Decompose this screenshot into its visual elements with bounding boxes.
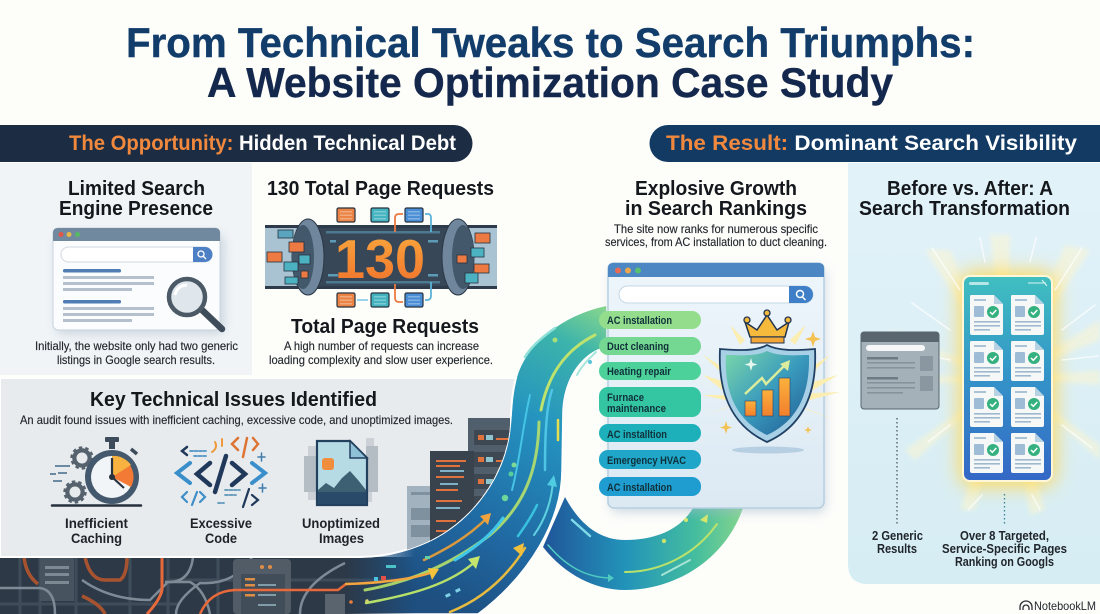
glow burst behind results (890, 235, 1100, 515)
heading: explosive growth: in Search Rankings (625, 197, 807, 220)
label: inefficient caching: Caching (71, 530, 122, 546)
label: over 8 targeted: Ranking on Googls (955, 555, 1054, 569)
text: initially: Initially, the website only had two generic (35, 339, 238, 353)
ribbon: lower u-shaped flow (543, 497, 743, 590)
label: over 8 targeted: Service-Specific Pages (942, 542, 1067, 556)
text: requests description: loading complexity and slow user experience. (269, 353, 493, 367)
ribbon: main s-curve flow (340, 305, 607, 614)
label: inefficient caching (65, 515, 128, 546)
before: gray browser (861, 332, 939, 409)
title: A Website Optimization Case Study (207, 59, 894, 106)
ranking chips: AC installation (607, 315, 672, 327)
panel: limited search engine presence (35, 177, 238, 367)
heading: 130 total page requests: 130 Total Page Requests (267, 177, 494, 200)
header: the opportunity (0, 125, 472, 162)
text: audit description: An audit found issues with inefficient caching, excessive code, and unoptimized images. (20, 413, 453, 427)
heading: limited search (59, 177, 213, 220)
panel: limited search background (0, 163, 252, 375)
after: phone with eight result pages (963, 276, 1052, 481)
illustration: server stacks (407, 418, 510, 556)
heading: before vs after (859, 177, 1070, 220)
heading: limited search: Engine Presence (59, 197, 213, 220)
label: over 8 targeted (942, 529, 1067, 569)
icon: pixelated image file (304, 438, 378, 505)
icon: shield with crown (702, 310, 840, 454)
heading: before vs after: Before vs. After: A (887, 177, 1053, 200)
panel: explosive growth (599, 177, 840, 513)
title (126, 19, 975, 106)
ranking chips: AC installtion (607, 429, 667, 441)
background: dark circuit strip (0, 557, 440, 614)
text: requests description (269, 339, 493, 367)
text: rankings description (605, 222, 827, 249)
heading: total page requests: Total Page Requests (291, 315, 479, 338)
ranking chips: Duct cleaning (607, 341, 669, 353)
header: the result (650, 125, 1100, 162)
text: initially: listings in Google search results. (57, 353, 215, 367)
title: From Technical Tweaks to Search Triumphs: (126, 19, 975, 66)
panel: before vs after (848, 163, 1100, 584)
text: initially (35, 339, 238, 367)
ranking chips: maintenance (607, 403, 666, 415)
ranking chips: Heating repair (607, 366, 672, 378)
ranking chips (599, 311, 701, 496)
ranking chips: Furnace (607, 392, 644, 404)
icon: browser with magnifier (53, 228, 224, 334)
number 130: 130 (335, 228, 425, 290)
label: over 8 targeted: Over 8 Targeted, (960, 529, 1049, 543)
label: unoptimized images: Images (319, 530, 364, 546)
label: excessive code: Code (205, 530, 237, 546)
text: requests description: A high number of requests can increase (284, 339, 479, 353)
illustration: 130 pipe (265, 208, 497, 307)
connector: dotted lines (897, 418, 1004, 524)
label: 2 generic results (872, 529, 923, 556)
heading: explosive growth (625, 177, 807, 220)
label: unoptimized images (302, 515, 380, 546)
label: 2 generic results: Results (877, 542, 917, 556)
heading: key technical issues: Key Technical Issues Identified (90, 388, 377, 411)
panel: 130 total page requests (265, 177, 497, 367)
heading: limited search: Limited Search (68, 177, 205, 200)
label: excessive code (190, 515, 252, 546)
heading: before vs after: Search Transformation (859, 197, 1070, 220)
header: the opportunity: The Opportunity: Hidden Technical Debt (69, 131, 456, 155)
icon: code brackets (177, 438, 266, 507)
ranking chips: AC installation (607, 482, 672, 494)
heading: explosive growth: Explosive Growth (635, 177, 797, 200)
panel: key technical issues identified (0, 378, 516, 557)
ranking chips: Emergency HVAC (607, 455, 686, 467)
label: 2 generic results: 2 Generic (872, 529, 923, 543)
browser window: search rankings (599, 263, 840, 513)
label: excessive code: Excessive (190, 515, 252, 531)
label: inefficient caching: Inefficient (65, 515, 128, 531)
label: unoptimized images: Unoptimized (302, 515, 380, 531)
text: rankings description: services, from AC installation to duct cleaning. (605, 235, 827, 249)
icon: stopwatch with gears (50, 437, 141, 506)
header: the result: The Result: Dominant Search Visibility (666, 131, 1077, 155)
text: rankings description: The site now ranks for numerous specific (614, 222, 818, 236)
